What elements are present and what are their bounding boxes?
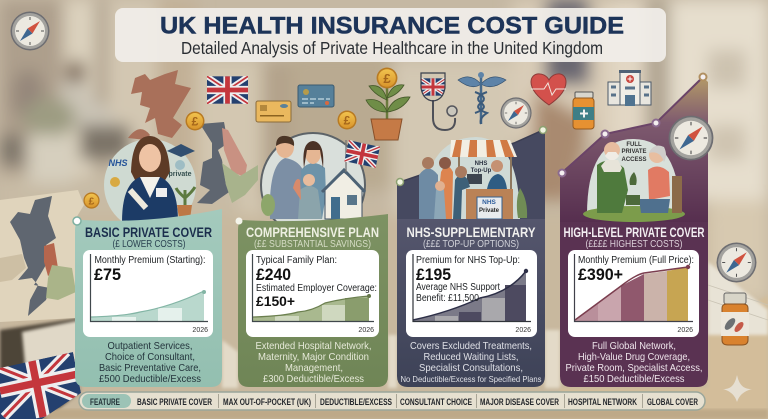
feature table strip	[79, 392, 705, 410]
icon: receptionist illustration	[104, 136, 196, 231]
price card and chart: 2026	[358, 327, 374, 334]
icon: stethoscope with flag	[420, 73, 457, 130]
feature list: Basic Preventative Care,	[99, 362, 201, 374]
icon: compass mid	[500, 97, 532, 129]
subtitle: Detailed Analysis of Private Healthcare in the United Kingdom	[181, 38, 603, 58]
icon: compass over high-level panel	[669, 116, 713, 160]
table column labels: HOSPITAL NETWORK	[568, 397, 637, 407]
price card and chart: Typical Family Plan:	[256, 255, 337, 266]
tier label: (££££ HIGHEST COSTS)	[586, 239, 682, 250]
feature list: £500 Deductible/Excess	[99, 373, 201, 385]
price card and chart: £150+	[256, 293, 295, 309]
chart markers	[558, 74, 706, 176]
tier label: (££ SUBSTANTIAL SAVINGS)	[254, 239, 371, 250]
price card and chart: £195	[416, 265, 451, 284]
icon: caduceus	[458, 72, 506, 124]
icon: heart with pulse	[531, 74, 566, 105]
feature list: Specialist Consultations,	[419, 362, 523, 374]
price card and chart	[406, 250, 537, 337]
feature list: Private Room, Specialist Access,	[566, 362, 702, 374]
icon: Scotland map	[128, 70, 191, 140]
price card and chart: Monthly Premium (Starting):	[94, 255, 206, 266]
feature list: High-Value Drug Coverage,	[578, 351, 690, 363]
icon: NHS top-up stall: NHS	[475, 161, 487, 167]
icon: compass top left	[10, 12, 50, 50]
icon: pill bottle	[721, 293, 749, 345]
icon: NHS top-up stall	[419, 137, 527, 221]
feature pill	[82, 394, 131, 408]
price card and chart: £240	[256, 265, 291, 284]
table column labels: MAJOR DISEASE COVER	[480, 397, 559, 407]
icon: gardening couple	[583, 139, 685, 222]
feature list: £150 Deductible/Excess	[584, 373, 684, 385]
table column labels: DEDUCTIBLE/EXCESS	[320, 397, 392, 407]
icon: money plant	[366, 68, 410, 140]
icon: receptionist illustration: NHS	[108, 158, 128, 168]
heading: HIGH-LEVEL PRIVATE COVER	[564, 224, 704, 240]
icon: NHS top-up stall: Top-Up	[471, 168, 492, 174]
feature list: Maternity, Major Condition	[258, 351, 369, 363]
icon: compass on desk	[717, 243, 756, 282]
price card and chart	[83, 250, 213, 337]
price card and chart: 2026	[515, 327, 531, 334]
tier label: (£ LOWER COSTS)	[112, 239, 186, 250]
icon: family illustration	[261, 133, 380, 237]
icon: gardening couple: ACCESS	[621, 157, 647, 163]
heading: COMPREHENSIVE PLAN	[246, 224, 379, 240]
price card and chart: Monthly Premium (Full Price):	[578, 255, 694, 266]
price card and chart: £390+	[578, 265, 623, 284]
price card and chart: Benefit: £11,500	[416, 293, 479, 304]
heading: BASIC PRIVATE COVER	[85, 224, 212, 240]
panel: NHS-supplementary	[397, 219, 545, 387]
feature list: Reduced Waiting Lists,	[424, 351, 518, 363]
icon: NHS top-up stall: NHS	[482, 199, 497, 206]
table column labels	[137, 397, 698, 407]
table column labels: GLOBAL COVER	[647, 397, 698, 407]
feature list	[256, 340, 372, 385]
price card and chart: Average NHS Support	[416, 282, 500, 293]
icon: medicine bottle	[573, 92, 594, 129]
icon: sparkle	[723, 375, 752, 402]
feature list: Outpatient Services,	[108, 340, 192, 352]
title: UK HEALTH INSURANCE COST GUIDE	[160, 12, 624, 40]
price card and chart: £75	[94, 265, 121, 284]
feature list: No Deductible/Excess for Specified Plans	[400, 374, 542, 384]
price card and chart	[568, 250, 699, 337]
price card and chart: 2026	[677, 327, 693, 334]
icon: gardening couple: PRIVATE	[621, 149, 647, 155]
panel: comprehensive plan	[236, 214, 388, 387]
panel: high-level private cover	[560, 222, 708, 387]
panel: high-level chart backdrop	[558, 74, 708, 230]
feature list: Extended Hospital Network,	[256, 340, 372, 352]
panel: NHS-supplementary chart backdrop	[396, 126, 546, 225]
table column labels: CONSULTANT CHOICE	[400, 397, 472, 407]
feature pill: FEATURE	[90, 397, 120, 407]
tier label: (£££ TOP-UP OPTIONS)	[423, 239, 519, 250]
price card and chart: Premium for NHS Top-Up:	[416, 255, 520, 266]
icon: gardening couple: FULL	[626, 142, 642, 148]
feature list	[566, 340, 702, 385]
panel: title banner	[115, 8, 666, 62]
icon: blue credit card	[298, 85, 334, 107]
icon: receptionist illustration: private	[169, 171, 192, 178]
icon: England and Wales map	[197, 122, 258, 204]
table column labels: MAX OUT-OF-POCKET (UK)	[223, 397, 311, 407]
feature list: £300 Deductible/Excess	[263, 373, 364, 385]
feature list: Full Global Network,	[592, 340, 676, 352]
icon: hospital building	[608, 70, 651, 106]
feature list: Choice of Consultant,	[105, 351, 195, 363]
feature list: Management,	[285, 362, 343, 374]
feature list	[99, 340, 201, 385]
price card and chart: 2026	[192, 327, 208, 334]
price card and chart	[246, 250, 379, 337]
price card and chart: Estimated Employer Coverage:	[256, 283, 377, 294]
icon: gold credit card	[256, 101, 291, 122]
panel: basic private cover	[73, 209, 222, 387]
icon: coins	[83, 110, 357, 209]
chart markers	[396, 126, 546, 186]
heading: NHS-SUPPLEMENTARY	[406, 224, 536, 240]
feature list	[400, 340, 542, 384]
icon: NHS top-up stall: Private	[479, 208, 500, 214]
feature list: Covers Excluded Treatments,	[410, 340, 532, 352]
icon: UK flag	[207, 76, 248, 104]
icon: UK flag bottom left	[0, 352, 81, 419]
left map on paper	[0, 190, 84, 322]
table column labels: BASIC PRIVATE COVER	[137, 397, 212, 407]
